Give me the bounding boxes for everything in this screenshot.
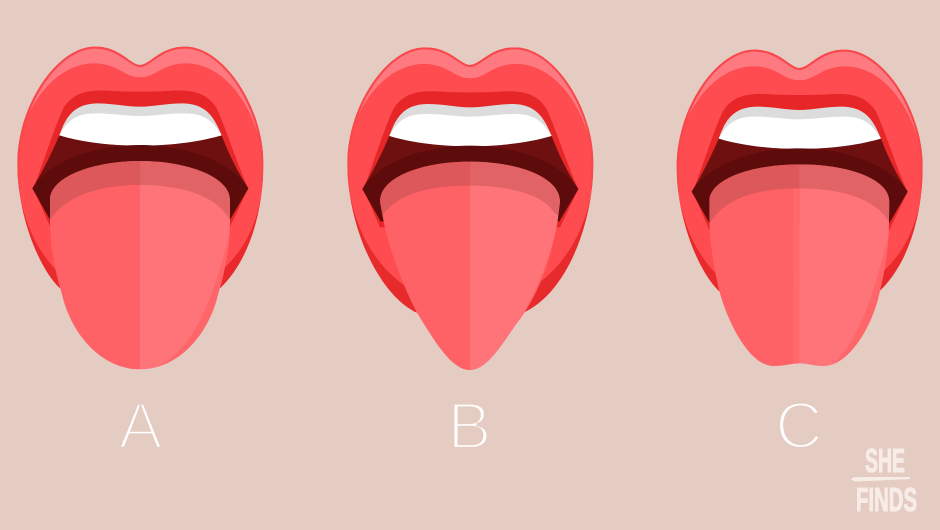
tongue illustration C xyxy=(676,50,923,366)
logo: She Finds xyxy=(851,442,917,518)
lips C xyxy=(676,50,923,292)
tongue illustration B xyxy=(347,47,594,370)
label B: B xyxy=(447,388,492,462)
lips A xyxy=(17,46,264,288)
lips B xyxy=(347,47,594,313)
tongue illustration A xyxy=(17,46,264,370)
tongue B xyxy=(380,162,560,370)
label C: C xyxy=(775,388,823,462)
logo: She Finds: SHE xyxy=(865,442,905,479)
label A: A xyxy=(118,388,163,462)
tongue C xyxy=(709,164,890,366)
tongue A xyxy=(50,161,230,370)
